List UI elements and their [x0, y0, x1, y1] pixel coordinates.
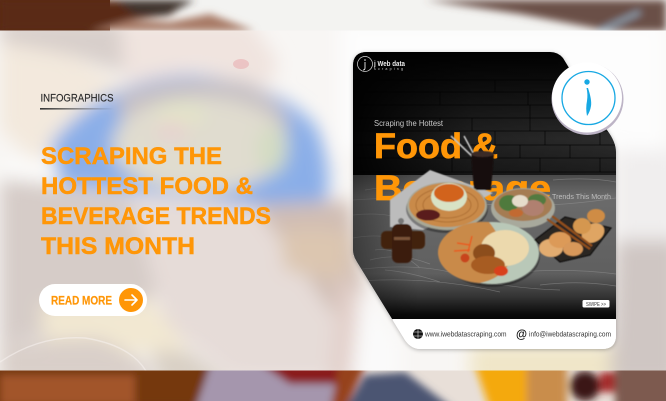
contact: email: info@iwebdatascraping.com — [529, 332, 611, 338]
headline: Food & Beverage — [374, 120, 610, 201]
badge: brand circle — [552, 62, 624, 135]
bowl: salad — [491, 188, 555, 228]
background: bottom photo band — [0, 370, 666, 401]
eyebrow label: INFOGRAPHICS: INFOGRAPHICS — [40, 92, 114, 104]
title — [41, 143, 271, 260]
brand logo: scraping — [374, 67, 403, 71]
contact: email: @ — [516, 327, 527, 341]
contact: website: www.iwebdatascraping.com — [424, 332, 507, 338]
headline: Food & Beverage: Beverage — [374, 169, 551, 208]
bread basket — [535, 209, 611, 262]
icon: arrow in circle — [119, 288, 143, 312]
pepper grinders — [381, 218, 425, 263]
read more button: READ MORE — [51, 294, 112, 308]
plate: soup — [406, 182, 488, 233]
eyebrow label: INFOGRAPHICS — [40, 92, 114, 110]
read more button — [39, 284, 147, 316]
drink glass — [451, 136, 494, 190]
headline: Food & Beverage: Scraping the Hottest — [374, 118, 444, 128]
brand logo: j Web data — [373, 61, 405, 68]
wooden table — [353, 175, 616, 320]
background: top photo band — [0, 0, 666, 31]
headline: Food & Beverage: Trends This Month — [552, 192, 611, 201]
panel: social post card — [353, 52, 616, 350]
title: THIS MONTH — [41, 233, 195, 260]
wine glass rim — [0, 338, 146, 371]
headline: Food & Beverage: Food & — [374, 127, 498, 166]
contact: website — [413, 329, 507, 339]
food photo — [381, 136, 611, 287]
title: SCRAPING THE — [41, 143, 222, 170]
contact: email — [516, 330, 611, 340]
swipe tag: SWIPE >> — [586, 302, 606, 308]
title: HOTTEST FOOD & — [41, 173, 253, 200]
brick wall backdrop — [353, 52, 616, 176]
nail — [233, 59, 249, 69]
title: BEVERAGE TRENDS — [41, 203, 271, 230]
plate: cutlets and noodles — [438, 222, 540, 287]
swipe tag — [582, 300, 610, 308]
brand logo — [358, 56, 405, 72]
napkin — [390, 170, 493, 230]
footer strip — [392, 319, 616, 349]
